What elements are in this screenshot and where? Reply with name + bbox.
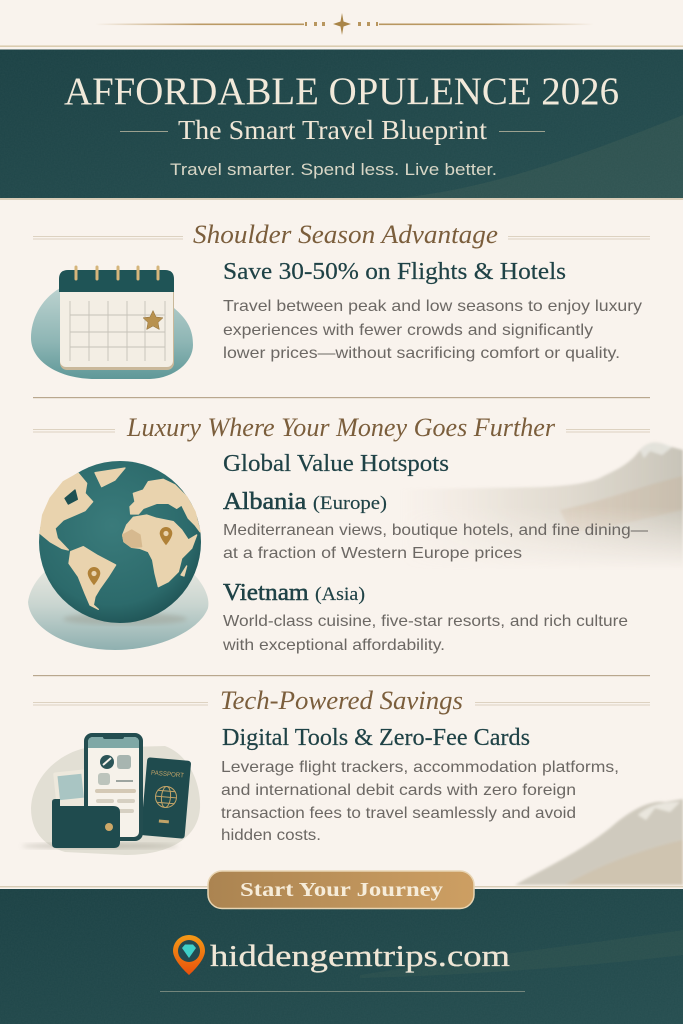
subheading: Digital Tools & Zero-Fee Cards: [222, 725, 530, 751]
body copy: Leverage flight trackers, accommodation platforms,: [221, 759, 619, 776]
body copy: [223, 298, 642, 362]
icon: globe: [28, 461, 208, 650]
footer rule: [160, 991, 525, 992]
destination: Vietnam: [222, 580, 628, 654]
footer swoosh: [360, 930, 683, 978]
body copy: Travel between peak and low seasons to enjoy luxury: [223, 298, 642, 315]
website address: hiddengemtrips.com: [210, 938, 510, 973]
destination: Albania: Mediterranean views, boutique hotels, and fine dining—: [223, 522, 648, 539]
section one text: [223, 259, 642, 362]
phone: [84, 733, 143, 841]
header swoosh: [400, 115, 683, 198]
icon: phone, wallet and passport: [22, 733, 200, 855]
destination: Vietnam: with exceptional affordability.: [222, 637, 445, 654]
destination: Albania: at a fraction of Western Europe prices: [223, 545, 522, 562]
body copy: and international debit cards with zero foreign: [221, 782, 576, 799]
passport: [141, 757, 191, 839]
body copy: experiences with fewer crowds and significantly: [223, 322, 593, 339]
section two text: [222, 451, 648, 654]
passport: PASSPORT: [151, 770, 184, 779]
map pin: South America: [88, 567, 100, 585]
boarding card: [53, 769, 89, 812]
footer band: [0, 886, 683, 1024]
wallet: [52, 799, 120, 848]
title: AFFORDABLE OPULENCE 2026: [64, 70, 619, 113]
call to action button: Start Your Journey: [240, 879, 443, 901]
body copy: transaction fees to travel seamlessly and avoid: [221, 805, 576, 822]
globe base: [28, 568, 208, 650]
header band: [0, 46, 683, 200]
mountains: section two backdrop: [448, 442, 683, 561]
section two heading: Luxury Where Your Money Goes Further: [126, 413, 556, 442]
body copy: lower prices—without sacrificing comfort or quality.: [223, 345, 620, 362]
top ornament: [95, 13, 594, 35]
destination: Albania: Albania (Europe): [223, 489, 387, 515]
backdrop blob: [31, 746, 200, 855]
section one heading: Shoulder Season Advantage: [193, 220, 498, 249]
destination: Vietnam: Vietnam (Asia): [223, 580, 365, 606]
call to action button: [208, 871, 474, 908]
subheading: Global Value Hotspots: [223, 451, 449, 477]
icon: gold star: [143, 310, 163, 330]
subheading: Save 30-50% on Flights & Hotels: [223, 259, 566, 285]
tagline: Travel smarter. Spend less. Live better.: [170, 160, 497, 179]
map pin: Africa: [160, 527, 172, 545]
logo: gem location pin: [173, 935, 205, 975]
icon: calendar: [31, 267, 193, 379]
body copy: hidden costs.: [221, 827, 321, 844]
destination: Albania: [223, 489, 648, 562]
subtitle: The Smart Travel Blueprint: [178, 115, 488, 145]
section three text: [221, 725, 619, 844]
destination: Vietnam: World-class cuisine, five-star resorts, and rich culture: [223, 613, 628, 630]
body copy: [221, 759, 619, 844]
continents: [40, 468, 200, 609]
section three heading: Tech-Powered Savings: [220, 686, 463, 715]
mountains: lower right backdrop: [515, 799, 683, 885]
